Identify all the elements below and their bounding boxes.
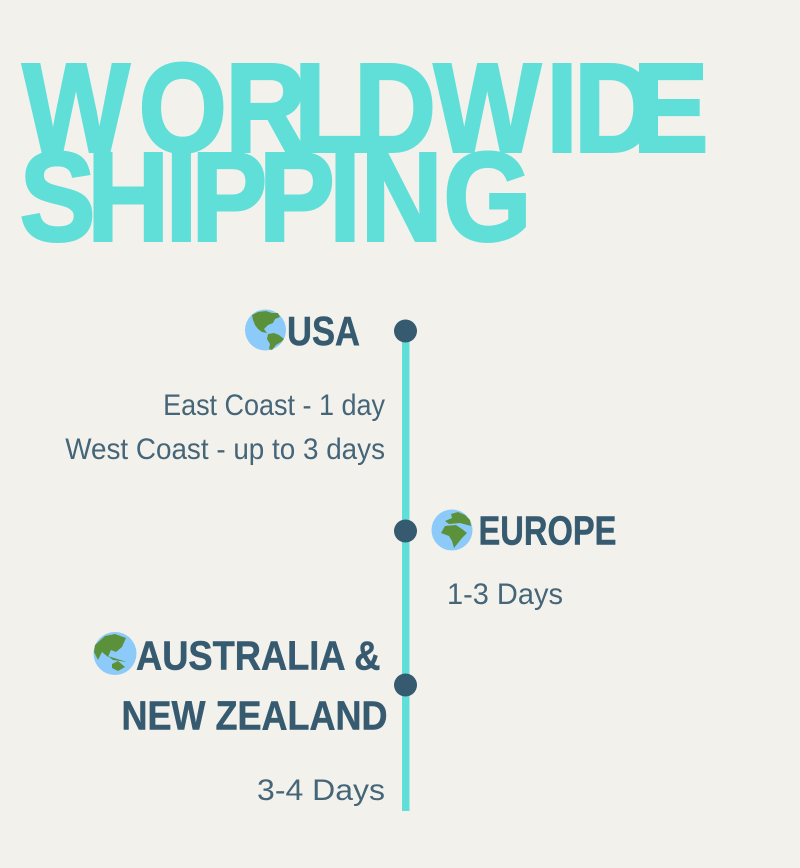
text: USA delivery times: East Coast - 1 day (163, 389, 386, 422)
title: SHIPPING (20, 127, 532, 268)
heading: Australia and New Zealand (122, 633, 387, 739)
marker: Europe (394, 520, 417, 542)
title (20, 38, 708, 268)
text: USA delivery times (65, 389, 386, 466)
timeline line (402, 331, 410, 811)
title: WORLDWIDE (23, 38, 708, 179)
timeline (394, 320, 417, 811)
text: Australia delivery time: 3-4 Days (257, 773, 385, 807)
icon: globe Europe and Africa (432, 510, 472, 550)
heading: USA: USA (287, 309, 360, 355)
marker: Australia (394, 674, 417, 696)
heading: Australia and New Zealand: NEW ZEALAND (122, 693, 387, 739)
icon: globe Asia and Oceania (94, 632, 136, 675)
heading: Europe: EUROPE (478, 507, 616, 553)
icon: globe Americas (245, 310, 286, 350)
text: Europe delivery time: 1-3 Days (447, 578, 563, 611)
heading: Australia and New Zealand: AUSTRALIA & (136, 633, 381, 679)
text: USA delivery times: West Coast - up to 3 days (65, 433, 385, 466)
marker: USA (394, 320, 417, 342)
